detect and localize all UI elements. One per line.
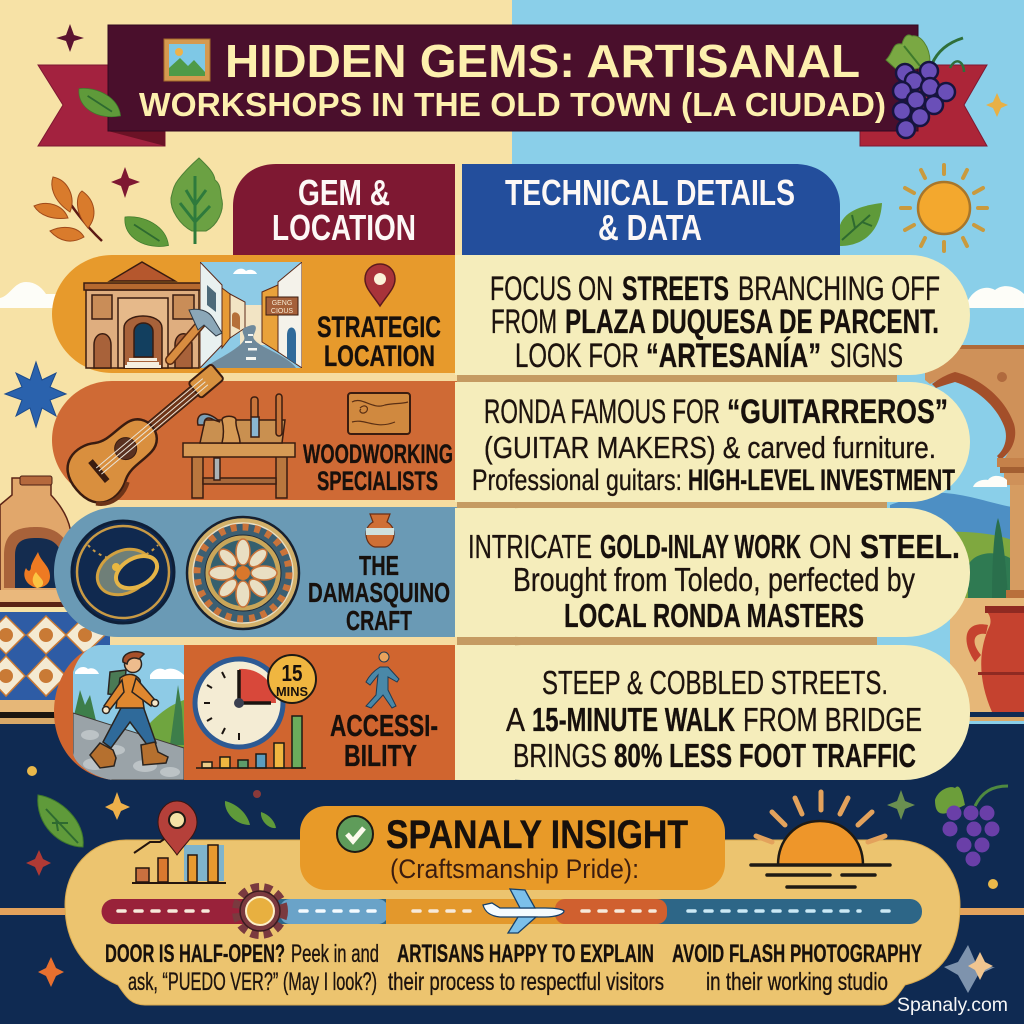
- header: technical details and data: [462, 164, 840, 255]
- tip 2 text: their process to respectful visitors: [388, 968, 664, 996]
- row 2 details pill: (GUITAR MAKERS) & carved furniture.: [484, 430, 936, 465]
- row 1 details pill: FOCUS ON: [490, 270, 613, 308]
- row 3 details pill: GOLD-INLAY WORK: [600, 528, 801, 565]
- illustration: hiker on cobbled path: [73, 645, 184, 780]
- cloud right: [965, 286, 1024, 308]
- icon: check badge: [337, 816, 373, 852]
- tip 3 text: in their working studio: [706, 968, 888, 996]
- decorative stars top: [56, 24, 1008, 198]
- row 3 label: DAMASQUINO: [308, 577, 450, 608]
- table strips between rows: [110, 370, 897, 648]
- tip 1 text: [105, 940, 379, 996]
- row 3 details pill: ON: [809, 528, 852, 565]
- row 2 details pill: RONDA FAMOUS FOR: [484, 393, 720, 431]
- row 1 details pill: “ARTESANÍA”: [646, 337, 821, 375]
- icon: small vase: [366, 514, 394, 547]
- icon: wood plank: [348, 393, 410, 434]
- icon: sun: [901, 165, 987, 251]
- row 3 label: [308, 550, 450, 636]
- arch building right: [925, 345, 1024, 600]
- callout: insight heading: [300, 806, 725, 890]
- tip 1 text: ask, “PUEDO VER?” (May I look?): [128, 968, 377, 996]
- row 2 details pill: [455, 382, 970, 502]
- row 1 details pill: [455, 255, 970, 375]
- leaf small green: [125, 217, 168, 246]
- row 4 details pill: [455, 645, 970, 780]
- row 4 label: ACCESSI-: [330, 708, 438, 743]
- icon: chart with pin: [132, 801, 226, 883]
- row 4 details pill: 80% LESS FOOT TRAFFIC: [614, 737, 916, 774]
- sparkle bottom right: [944, 945, 995, 993]
- autumn leaves: [34, 177, 102, 241]
- row 3 details pill: Brought from Toledo, perfected by: [513, 561, 915, 598]
- row 4 label: [330, 708, 438, 773]
- row 3 details pill: STEEL.: [860, 528, 960, 565]
- row 1 details pill: FROM: [491, 303, 557, 341]
- row 3 details pill: INTRICATE: [468, 528, 592, 565]
- header: gem and location: LOCATION: [272, 207, 416, 248]
- row 3 label: CRAFT: [346, 605, 412, 636]
- ribbon fold shadows: [108, 131, 165, 146]
- row 1 label: STRATEGIC: [317, 311, 441, 344]
- icon: grapes with leaf top right: [886, 35, 964, 138]
- row 2 details pill: Professional guitars:: [472, 464, 682, 497]
- title ribbon right: [860, 65, 987, 146]
- callout: insight heading: (Craftsmanship Pride):: [390, 854, 639, 884]
- callout: insight heading: SPANALY INSIGHT: [386, 813, 688, 857]
- icon: decorated plate: [187, 517, 299, 629]
- icon: 15 mins badge: MINS: [276, 684, 308, 699]
- oven left: [0, 476, 72, 607]
- leaf on left ribbon: [79, 88, 121, 117]
- title line 1: HIDDEN GEMS: ARTISANAL: [225, 35, 860, 87]
- cloud left: [0, 282, 56, 308]
- tile wall left: [0, 612, 112, 712]
- distant hills right: [890, 493, 1012, 600]
- watermark: Spanaly.com: [897, 995, 1008, 1016]
- row 1 label: LOCATION: [324, 340, 435, 373]
- icon: street scene: [200, 262, 302, 368]
- leaf beside blue header: [840, 203, 882, 246]
- row 4 details pill: 15-MINUTE WALK: [532, 701, 735, 738]
- title ribbon left: [38, 65, 165, 146]
- row 2 label: [303, 439, 453, 496]
- icon: guitar: [57, 348, 239, 515]
- tip 2 text: ARTISANS HAPPY TO EXPLAIN: [397, 940, 654, 968]
- icon: walking figure: [366, 652, 399, 708]
- tip 3 text: [672, 940, 922, 996]
- timeline track: [102, 887, 922, 935]
- bottom decorations: [26, 790, 998, 987]
- row 4 details pill: A: [506, 701, 525, 738]
- tip 2 text: [388, 940, 664, 996]
- row 4 panel: accessibility: [54, 645, 457, 780]
- icon: workbench: [183, 394, 295, 498]
- icon: sunset: [751, 792, 890, 887]
- icon: location pin: [365, 264, 395, 306]
- hiker figure: [90, 652, 168, 768]
- row 1 panel: strategic location: [52, 255, 457, 373]
- row 4 details pill: FROM BRIDGE: [743, 701, 922, 738]
- row 1 details pill: SIGNS: [830, 337, 903, 375]
- row 3 label: THE: [359, 550, 399, 581]
- icon: street scene: GENG: [272, 300, 292, 307]
- icon: airplane: [483, 889, 564, 933]
- header: gem and location: GEM &: [298, 172, 390, 213]
- tip 1 text: DOOR IS HALF-OPEN?: [105, 940, 285, 968]
- star blue: [5, 362, 66, 427]
- header: gem and location: [233, 164, 455, 255]
- row 3 details pill: LOCAL RONDA MASTERS: [564, 597, 864, 634]
- header: technical details and data: & DATA: [598, 207, 702, 248]
- tip 1 text: Peek in and: [291, 940, 379, 968]
- icon: moorish building: [84, 262, 202, 368]
- row 1 details pill: LOOK FOR: [515, 337, 639, 375]
- icon: clock: [195, 659, 283, 747]
- title banner: [108, 25, 918, 131]
- row 2 details pill: “GUITARREROS”: [727, 393, 948, 431]
- panel: spanaly insight: [65, 792, 960, 1005]
- title line 2: WORKSHOPS IN THE OLD TOWN (LA CIUDAD): [139, 86, 886, 123]
- bar chart: [196, 716, 306, 768]
- row 3 details pill: [455, 508, 970, 637]
- header: technical details and data: TECHNICAL DETAILS: [505, 172, 795, 213]
- icon: 15 mins badge: 15: [282, 660, 303, 686]
- leaf large green: [171, 158, 222, 244]
- icon: street scene: CIOUS: [271, 308, 293, 315]
- icon: framed picture: [164, 39, 210, 81]
- row 1 details pill: STREETS: [622, 270, 729, 308]
- row 4 label: BILITY: [344, 738, 417, 773]
- icon: gold ring medallion: [72, 521, 174, 623]
- row 2 panel: woodworking specialists: [52, 348, 457, 515]
- icon: hammer: [170, 309, 222, 360]
- row 2 label: WOODWORKING: [303, 439, 453, 469]
- row 4 details pill: STEEP & COBBLED STREETS.: [542, 664, 888, 701]
- row 3 panel: damasquino craft: [54, 507, 457, 637]
- icon: grapes bottom right: [935, 786, 1008, 866]
- row 2 label: SPECIALISTS: [317, 466, 438, 496]
- navy lower background: [0, 712, 1024, 1024]
- row 1 details pill: BRANCHING OFF: [738, 270, 940, 308]
- icon: gear: [236, 887, 284, 935]
- icon: 15 mins badge: [268, 655, 316, 703]
- row 1 label: [317, 311, 441, 373]
- row 4 details pill: BRINGS: [513, 737, 607, 774]
- terracotta wall and vase right: [950, 598, 1024, 715]
